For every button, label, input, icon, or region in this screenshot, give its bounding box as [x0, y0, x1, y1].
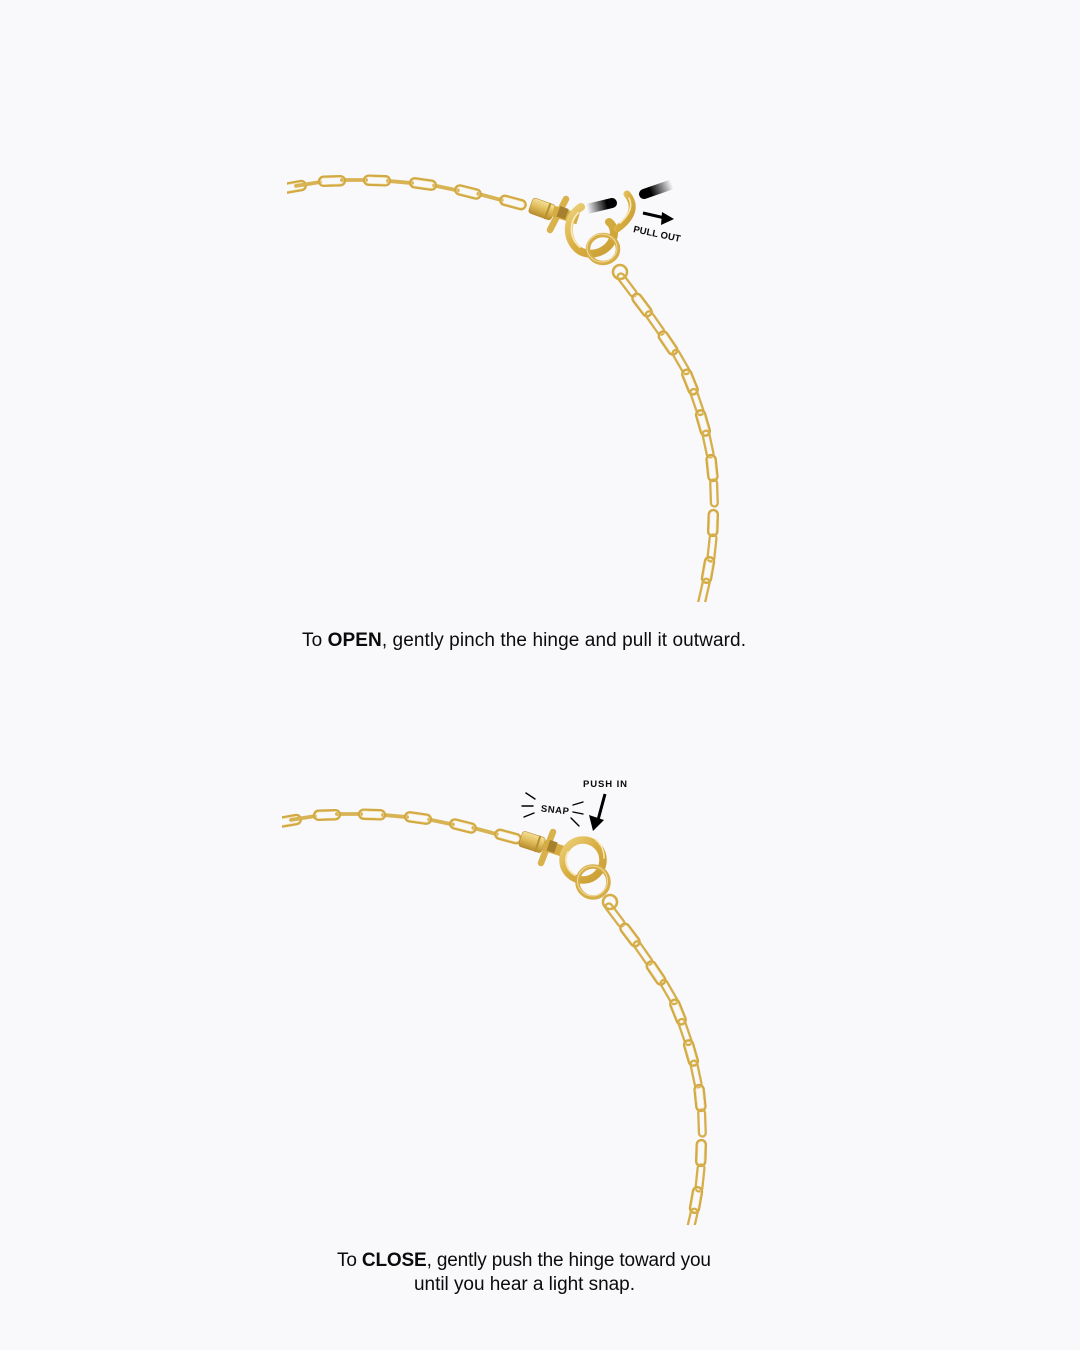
necklace chain, left strand: [274, 809, 522, 844]
necklace chain, right strand: [616, 272, 718, 606]
arrow: pull out: [643, 212, 674, 225]
caption: close instruction: until you hear a light snap.: [414, 1274, 635, 1295]
panel: close step: [274, 779, 711, 1295]
caption: close instruction: [337, 1250, 711, 1295]
snap sound dashes: [522, 793, 583, 826]
closed clasp: [518, 830, 617, 909]
caption: close instruction: To CLOSE, gently push the hinge toward you: [337, 1250, 711, 1271]
motion streak: hinge pulled: [587, 203, 612, 209]
panel: open step: [279, 175, 746, 651]
caption: open instruction: To OPEN, gently pinch the hinge and pull it outward.: [302, 630, 746, 651]
motion streak: hinge pulled, outer: [644, 185, 670, 194]
infographic canvas: [282, 174, 744, 1294]
necklace chain, left strand: [279, 175, 527, 210]
label: pull out: PULL OUT: [632, 224, 682, 245]
necklace chain, right strand: [604, 902, 706, 1236]
open clasp: [528, 194, 632, 279]
label: push in: PUSH IN: [583, 779, 627, 790]
arrow: push in: [589, 794, 605, 831]
label: snap: SNAP: [540, 804, 570, 817]
